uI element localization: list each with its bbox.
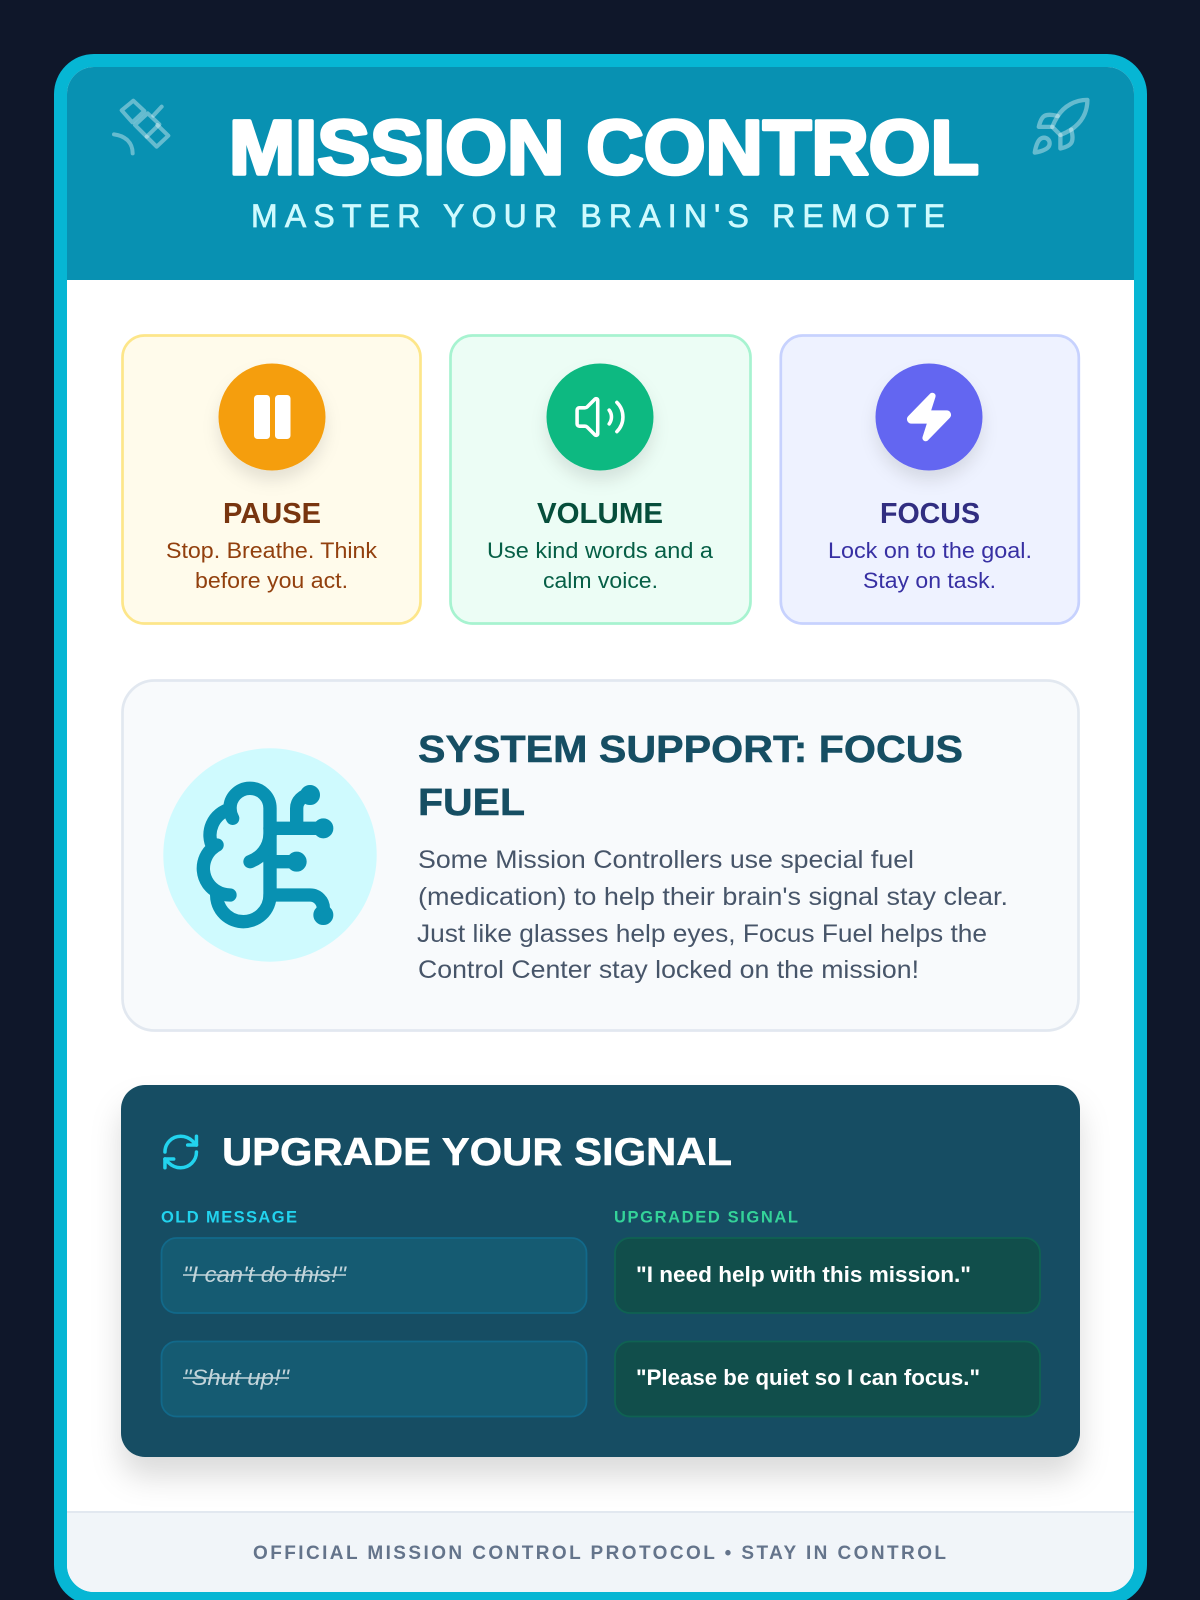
- old message 1: "I can't do this!": [183, 1262, 347, 1287]
- focus heading: FOCUS: [880, 498, 980, 530]
- subtitle: MASTER YOUR BRAIN'S REMOTE: [251, 198, 945, 234]
- icon: refresh: [165, 1136, 196, 1168]
- panel: upgrade your signal: [121, 1085, 1080, 1457]
- title: MISSION CONTROL: [229, 105, 979, 191]
- upgraded signal 1: [615, 1238, 1040, 1313]
- support heading: [418, 729, 963, 824]
- pause description: before you act.: [195, 568, 348, 593]
- pause heading: PAUSE: [223, 498, 321, 530]
- support heading: SYSTEM SUPPORT: FOCUS: [418, 729, 963, 771]
- volume description: calm voice.: [543, 568, 658, 593]
- old message 1: [162, 1238, 586, 1313]
- column label: upgraded signal: UPGRADED SIGNAL: [614, 1208, 798, 1226]
- pause description: Stop. Breathe. Think: [166, 538, 378, 563]
- icon: lightning bolt: [876, 364, 982, 470]
- volume description: [487, 538, 713, 593]
- panel: system support: [122, 680, 1078, 1030]
- header band: [67, 67, 1134, 280]
- pause description: [166, 538, 378, 593]
- icon: brain circuit: [163, 748, 377, 962]
- support body text: [417, 846, 1008, 984]
- support body text: Just like glasses help eyes, Focus Fuel helps the: [417, 920, 987, 948]
- panel: focus: [781, 336, 1079, 624]
- icon: satellite: [114, 101, 168, 153]
- old message 2: [162, 1342, 586, 1416]
- icon: pause: [218, 364, 326, 470]
- upgraded signal 2: [615, 1342, 1040, 1416]
- panel: pause: [122, 336, 420, 624]
- support body text: Control Center stay locked on the mission!: [418, 956, 919, 984]
- old message 2: "Shut up!": [183, 1365, 290, 1390]
- upgraded signal 1: "I need help with this mission.": [636, 1262, 971, 1287]
- upgrade heading: UPGRADE YOUR SIGNAL: [222, 1131, 732, 1174]
- footer: [67, 1511, 1134, 1592]
- support heading: FUEL: [418, 782, 525, 824]
- focus description: Stay on task.: [863, 568, 996, 593]
- volume heading: VOLUME: [537, 498, 663, 530]
- panel: volume: [450, 336, 750, 624]
- volume description: Use kind words and a: [487, 538, 713, 563]
- footer text: OFFICIAL MISSION CONTROL PROTOCOL • STAY IN CONTROL: [253, 1543, 946, 1564]
- icon: volume: [546, 364, 654, 470]
- focus description: [828, 538, 1032, 593]
- support body text: (medication) to help their brain's signal stay clear.: [418, 883, 1008, 911]
- column label: old message: OLD MESSAGE: [161, 1208, 297, 1226]
- focus description: Lock on to the goal.: [828, 538, 1032, 563]
- icon: rocket: [1035, 100, 1087, 153]
- upgraded signal 2: "Please be quiet so I can focus.": [636, 1365, 980, 1390]
- support body text: Some Mission Controllers use special fuel: [418, 846, 914, 874]
